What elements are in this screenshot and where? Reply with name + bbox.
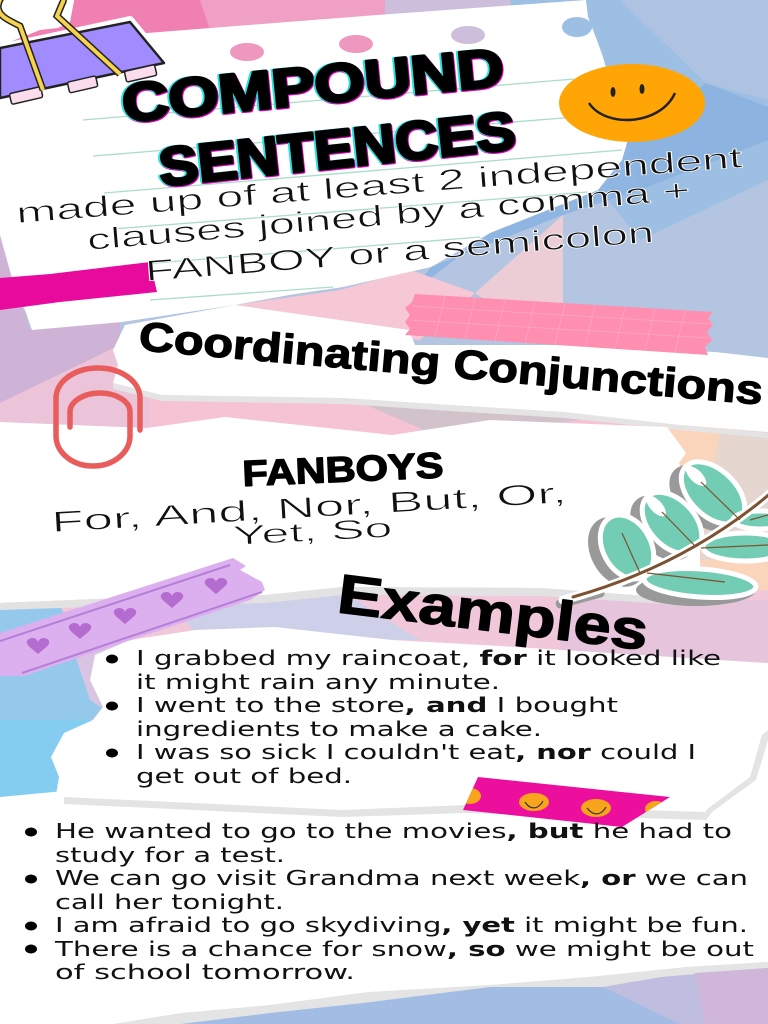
torn paper: conjunctions heading	[113, 305, 768, 432]
examples list 1: I was so sick I couldn't eat , nor could I	[136, 740, 696, 764]
definition text: FANBOY or a semicolon	[144, 217, 655, 288]
washi tape: lavender hearts: ♥	[158, 589, 186, 614]
examples list 2: of school tomorrow.	[55, 960, 355, 984]
examples list 1: I grabbed my raincoat, for it looked like	[136, 646, 721, 670]
icon: paperclip	[56, 368, 140, 466]
torn paper: lower note	[0, 725, 768, 1024]
examples list 2: study for a test.	[55, 843, 285, 867]
torn gray right edge	[706, 730, 768, 820]
washi tape: lavender hearts: ♥	[66, 620, 94, 645]
examples list 2: He wanted to go to the movies , but he had to	[55, 819, 732, 843]
blue notch in note	[562, 17, 592, 37]
definition text: made up of at least 2 independent	[15, 142, 743, 230]
examples list 1: I went to the store , and I bought	[136, 693, 618, 717]
washi tape: pink smileys	[459, 777, 670, 827]
heading: coordinating conjunctions: Coordinating Conjunctions	[137, 313, 765, 414]
heading: Examples: Examples	[335, 562, 652, 662]
examples list 2: I am afraid to go skydiving , yet it might be fun.	[55, 913, 748, 937]
icon: binder clip	[0, 0, 166, 104]
icon: smiley	[559, 64, 705, 142]
punched holes	[230, 26, 485, 61]
conjunction list: Yet, So	[232, 513, 393, 551]
torn paper: conjunctions heading gray edge	[113, 383, 768, 438]
washi tape: pink grid	[405, 294, 713, 355]
examples list 2: There is a chance for snow , so we might be out	[54, 937, 754, 961]
examples list 1	[106, 646, 721, 788]
examples list 1: it might rain any minute.	[136, 670, 500, 694]
examples list 2	[25, 819, 754, 984]
conjunction list	[51, 477, 568, 551]
bottom background collage	[181, 968, 768, 1024]
icon: leaf sprig	[555, 450, 768, 609]
definition text	[15, 142, 743, 288]
gray torn edge at bottom	[113, 962, 768, 1024]
title: COMPOUND	[119, 38, 506, 134]
torn paper: FANBOYS note	[0, 417, 700, 603]
title	[119, 38, 518, 198]
bullet points list 1	[106, 654, 118, 758]
washi tape: lavender hearts: ♥	[111, 605, 139, 630]
torn paper: examples note	[51, 627, 768, 820]
examples list 1: ingredients to make a cake.	[136, 717, 542, 741]
examples list 2: call her tonight.	[55, 890, 284, 914]
torn paper: title note	[0, 0, 627, 330]
washi tape: lavender hearts: ♥	[202, 575, 230, 600]
washi tape: lavender hearts: ♥	[24, 635, 52, 660]
examples list 2: We can go visit Grandma next week , or we can	[55, 866, 748, 890]
definition text: clauses joined by a comma +	[86, 174, 691, 257]
heading: FANBOYS: FANBOYS	[242, 444, 444, 494]
conjunction list: For, And, Nor, But, Or,	[51, 477, 568, 539]
torn paper gray lower edge	[0, 587, 700, 610]
ruled lines on note	[83, 79, 622, 300]
washi tape: lavender hearts	[0, 558, 265, 676]
examples list 1: get out of bed.	[136, 764, 352, 788]
bullet points list 2	[25, 828, 37, 954]
title: SENTENCES	[156, 101, 518, 198]
decorative magenta strip	[0, 262, 157, 310]
gray torn edge under examples	[64, 797, 706, 820]
